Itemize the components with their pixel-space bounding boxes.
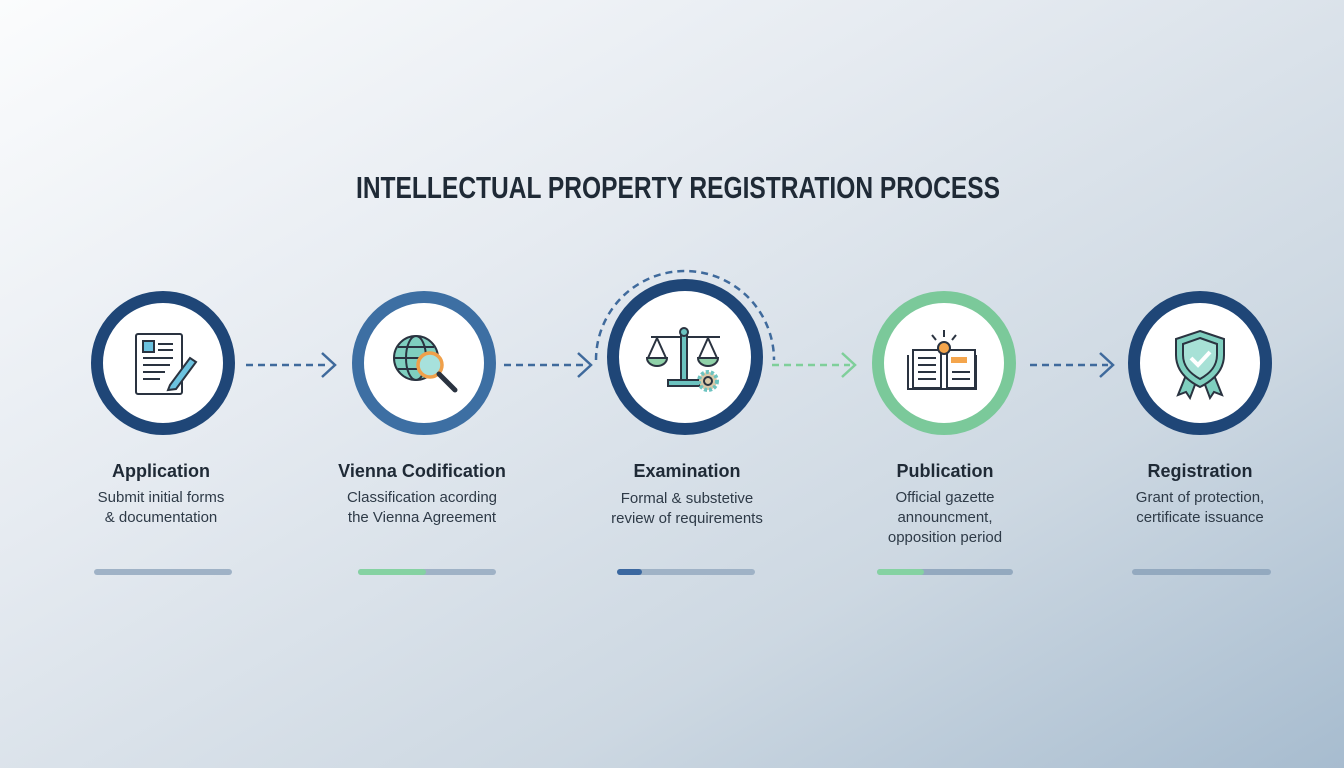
label: examination: Formal & substetive (621, 490, 753, 507)
label: publication: Official gazette (896, 489, 994, 506)
step 2: vienna codification (358, 297, 490, 429)
label: registration: certificate issuance (1136, 509, 1264, 526)
icon: shield with ribbon (1176, 331, 1224, 398)
label: publication: announcment, (897, 509, 993, 526)
label: publication: opposition period (888, 529, 1002, 546)
title: INTELLECTUAL PROPERTY REGISTRATION PROCESS (356, 170, 1000, 205)
arrow 2 (504, 353, 591, 377)
progress bar 2 (358, 569, 496, 575)
label: application: Application (112, 461, 210, 481)
label: registration: Grant of protection, (1136, 489, 1264, 506)
progress bar 4 (877, 569, 1013, 575)
icon: open book with light (908, 330, 976, 389)
icon: scales and gear (647, 328, 720, 390)
label: application: & documentation (105, 509, 217, 526)
step 3: examination (613, 285, 757, 429)
label: registration (1136, 461, 1264, 526)
arrow 4 (1030, 353, 1113, 377)
label: vienna codification (338, 461, 506, 526)
label: examination: review of requirements (611, 510, 763, 527)
step 5: registration (1134, 297, 1266, 429)
step 1: application (97, 297, 229, 429)
label: publication: Publication (896, 461, 994, 481)
label: publication (888, 461, 1002, 546)
label: vienna codification: Classification acording (347, 489, 497, 506)
label: application (98, 461, 224, 526)
icon: globe with magnifier (394, 336, 455, 390)
arrow 1 (246, 353, 335, 377)
step 4: publication (878, 297, 1010, 429)
label: vienna codification: Vienna Codification (338, 461, 506, 481)
label: examination (611, 461, 763, 527)
label: examination: Examination (633, 461, 741, 481)
icon: document with pencil (136, 334, 196, 394)
progress bar 1 (94, 569, 232, 575)
arrow 3 (772, 353, 855, 377)
label: application: Submit initial forms (98, 489, 224, 506)
progress bar 5 (1132, 569, 1271, 575)
label: vienna codification: the Vienna Agreement (348, 509, 497, 526)
progress bar 3 (617, 569, 755, 575)
dashed arc over examination (596, 271, 774, 360)
label: registration: Registration (1147, 461, 1253, 481)
